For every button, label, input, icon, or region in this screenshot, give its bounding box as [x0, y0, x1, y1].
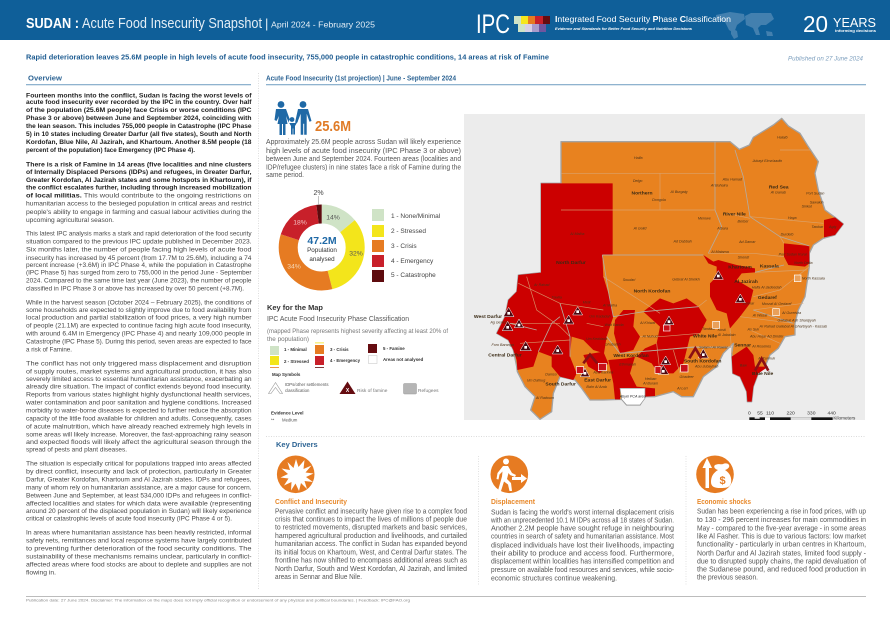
map labels: Salam / Ar Rawat — [699, 345, 728, 349]
map labels: Al Kurmuk — [757, 356, 775, 360]
refugee markers — [576, 275, 801, 373]
text block: overview paragraph 1: of the population (25.6M people) face Crisis or worse conditions (IPC — [26, 107, 252, 114]
displacement text: economic structures continue weakening. — [491, 576, 617, 583]
conflict text: humanitarian access. The conflict in Sudan has expanded beyond — [275, 541, 467, 548]
text block: overview paragraph 6: affected localities and states for which data were available (representing — [26, 500, 252, 507]
text block: overview paragraph 3: This latest IPC analysis marks a stark and rapid deterioration of the food security — [26, 231, 252, 238]
map labels: Um Keddada — [586, 337, 607, 341]
20 years logo — [803, 11, 876, 37]
map labels: Halaib — [777, 135, 788, 139]
map labels: Ag Geneina — [489, 320, 510, 324]
icon: displacement — [490, 456, 528, 493]
text block: overview paragraph 4: Catastrophe (IPC Phase 5). During this period, seven areas are expected to face — [26, 339, 252, 346]
20 years logo: 20 — [803, 11, 828, 37]
text block: projection summary: between June and September 2024. Fourteen areas (localities and — [266, 156, 461, 163]
scale bar: Kilometers — [833, 416, 856, 421]
text block: overview paragraph 1: acute food insecurity ever recorded by the IPC in the country. Over half — [26, 99, 252, 106]
text block: overview paragraph 2: Greater Kordofan, Al Jazirah states and some hotspots in Khartoum), if — [26, 177, 252, 184]
text block: overview paragraph 7: affected areas where food stocks are about to deplete and supplies are not — [26, 562, 252, 569]
map labels: Soudari — [623, 278, 635, 282]
map key: Key for the Map — [267, 303, 323, 312]
text block: overview paragraph 5: The conflict has not only triggered mass displacement and disruption — [26, 361, 252, 368]
text block: overview paragraph 3: 2024. Compared to the same time last year (June 2023), the number of people — [26, 277, 252, 284]
IPC logo: Evidence and Standards for Better Food Security and Nutrition Decisions — [555, 27, 692, 31]
text block: overview paragraph 5: morbidity to water-borne diseases is expected to further reduce the absorption — [26, 408, 252, 415]
map of Sudan: North Kordofan — [634, 289, 670, 295]
phase swatches — [270, 342, 424, 368]
map of Sudan — [464, 114, 865, 421]
map labels: Um Dafoug — [527, 378, 545, 382]
text block: overview paragraph 1 — [26, 93, 252, 154]
map labels: Heiban — [645, 377, 656, 381]
text block: overview paragraph 1: the lean season. This includes 755,000 people in Catastrophe (IPC Phase — [26, 123, 252, 130]
map labels: Shendi — [738, 255, 749, 259]
phase swatches: 1 - Minimal — [284, 347, 307, 352]
economic shocks heading: Economic shocks — [697, 497, 751, 506]
donut chart: 2% — [313, 190, 324, 197]
text block: overview paragraph 3: Six months later, the number of people facing high levels of acute food — [26, 247, 252, 254]
map labels: Dongola — [652, 198, 666, 202]
text block: overview paragraph 7 — [26, 530, 252, 577]
text block: overview paragraph 7: In areas where humanitarian assistance has been heavily restricted, informal — [26, 530, 252, 537]
displacement text: with an unprecedented 10.1 M IDPs across all 18 states of Sudan. — [490, 518, 674, 525]
phase 4 red areas — [497, 183, 843, 402]
text block: overview paragraph 6: The situation is especially critical for populations trapped into areas affected — [26, 461, 252, 468]
map labels: Abyei PCA area — [619, 394, 646, 398]
text block: overview paragraph 6: Darfur, Greater Kordofan, Khartoum and Al Jazirah states. IDPs and refugees, — [26, 477, 252, 484]
map labels: Port Sudan — [806, 192, 824, 196]
map labels: Sennar — [742, 301, 755, 305]
displacement text: displaced individuals have lost their livelihoods, impacting — [491, 542, 674, 549]
economic shocks text: functionality - particularly in urban centres in Khartoum, — [697, 542, 866, 549]
text block: overview paragraph 2: upcoming agricultural season. — [26, 217, 114, 224]
map labels: Delgo — [633, 179, 642, 183]
text block: overview paragraph 5: some areas will likely increase. Moreover, the fast-approaching rainy season — [26, 432, 252, 439]
conflict text: its initial focus on Khartoum, West, and Central Darfur states. The — [275, 549, 467, 556]
map labels: Agig — [828, 225, 836, 229]
map labels: Tawila — [552, 295, 562, 299]
text block: overview paragraph 5: of acute malnutrition, which have already reached extremely high levels in — [26, 424, 252, 431]
text block: overview paragraph 2: There is a risk of Famine in 14 areas (five localities and nine clusters — [26, 161, 252, 168]
text block: overview paragraph 4 — [25, 300, 252, 354]
text block: projection summary — [266, 139, 461, 179]
text block: projection summary: same period. — [266, 172, 304, 179]
text block: overview paragraph 2: the conflict escalates further, including through increased mobilization — [26, 185, 252, 192]
IPC logo — [476, 9, 731, 39]
text block: projection summary: IDP/refugee clusters) in nine states face a risk of Famine during the — [266, 164, 461, 171]
title — [26, 15, 375, 32]
displacement text: their ability to produce and access food. Furthermore, — [491, 550, 674, 557]
map of Sudan: North Darfur — [556, 260, 586, 266]
donut chart: 18% — [293, 220, 307, 226]
text block: overview paragraph 5: capacity of the little food available for children and adults. Consequently, cases — [26, 416, 252, 423]
map of Sudan: Gedaref — [758, 295, 777, 301]
displacement text: displacement within localities has intensified competition and — [491, 558, 674, 565]
conflict text: crisis that continues to impact the lives of millions of people due — [275, 517, 467, 524]
text block: overview paragraph 5: Reports from various states highlight highly dysfunctional health services, — [26, 392, 252, 399]
conflict text: frontline has now shifted to encompass additional areas such as — [275, 557, 467, 564]
map key: the population) — [267, 336, 309, 343]
displacement text — [490, 510, 675, 583]
economic shocks text — [697, 509, 867, 581]
abyei area not analysed — [620, 388, 645, 405]
icon: family — [274, 101, 312, 135]
text block: overview paragraph 7: to preventing further deterioration of the food security conditions. The — [26, 546, 252, 553]
economic shocks text: May - compared to the five-year average - in some areas — [697, 526, 866, 533]
key number: 25.6M — [315, 118, 351, 135]
map labels: Al Golid — [633, 226, 647, 230]
map labels: Ad Dabbah — [673, 239, 692, 243]
map labels: Halfa — [634, 156, 643, 160]
conflict text: to restricted movements, disrupted markets and basic services, — [275, 525, 467, 532]
world map watermark — [716, 12, 774, 39]
conflict text: areas in Sennar and Blue Nile. — [275, 574, 362, 581]
text block: overview paragraph 3 — [26, 231, 252, 292]
text block: overview paragraph 5: and expected floods will likely affect the agricultural season through the — [26, 439, 252, 446]
map of Sudan: South Kordofan — [684, 359, 721, 365]
text block: overview paragraph 2: of Internally Displaced Persons (IDPs) and refugees, in Greater Darfur, — [26, 169, 252, 176]
text block: overview paragraph 1: percent of the population) face Emergency (IPC Phase 4). — [26, 147, 195, 154]
icon: economic shocks — [696, 456, 734, 493]
projection heading: Acute Food Insecurity (1st projection) | June - September 2024 — [266, 76, 456, 82]
donut legend: 3 - Crisis — [391, 243, 417, 250]
map labels: Ghubaish — [605, 342, 620, 346]
displacement text: pressure on available food resources and services, while socio- — [491, 567, 675, 574]
map of Sudan: Kassala — [760, 263, 779, 269]
map labels: Durdeib — [781, 233, 793, 237]
headline: Rapid deterioration leaves 25.6M people in high levels of acute food insecurity, 755,000 people in catastrophic conditions, 14 areas at risk of Famine — [26, 52, 549, 62]
map labels: Al Roseires — [751, 344, 771, 348]
map of Sudan: Blue Nile — [752, 371, 774, 377]
map labels: Al Radoum — [535, 396, 554, 400]
map labels: North Kassala — [802, 276, 825, 280]
map labels: Tandalti — [702, 327, 715, 331]
icon: economic shocks: $ — [719, 475, 726, 487]
header banner — [0, 0, 890, 40]
publication date: Published on 27 June 2024 — [788, 56, 864, 62]
text block: overview paragraph 2: of local militias. This would contribute to the ongoing restrictions on — [26, 193, 252, 200]
text block: overview paragraph 4: a risk of Famine. — [26, 347, 72, 354]
map of Sudan: West Darfur — [474, 314, 502, 320]
displacement heading: Displacement — [491, 497, 536, 506]
map labels: Jubayt Elma'aadin — [751, 159, 782, 163]
text block: overview paragraph 4: While in the harvest season (October 2024 – February 2025), the conditions of — [26, 300, 252, 307]
economic shocks text: to 130 - 296 percent increases for main commodities in — [697, 517, 866, 524]
scale bar: 440 — [827, 410, 836, 416]
map labels: Tawkar — [812, 225, 824, 229]
text block: overview paragraph 4: with around 6.4M in Emergency (IPC Phase 4) and nearly 109,000 people in — [25, 331, 252, 338]
map of Sudan: Central Darfur — [488, 353, 522, 359]
text block: overview paragraph 5: of supply routes, market systems and agricultural production, it has also — [26, 369, 252, 376]
map labels: Bahr Al Arab — [586, 385, 607, 389]
map labels: Melit — [583, 300, 592, 304]
map labels: Port Sudan Rural — [779, 253, 807, 257]
map of Sudan: Khartoum — [728, 264, 752, 270]
map labels: Kosti — [718, 328, 726, 332]
state and locality boundaries — [510, 150, 823, 373]
map labels: Ad Damar — [738, 240, 756, 244]
map symbols — [268, 372, 439, 394]
map of Sudan: Sennar — [734, 343, 751, 349]
map labels: Al Leri — [676, 387, 688, 391]
text block: overview paragraph 4: some households are expected to slightly improve due to food availability from — [26, 307, 252, 314]
title: April 2024 - February 2025 — [271, 20, 375, 30]
map labels: Halfa Al Jadeedah — [752, 285, 782, 289]
text block: overview paragraph 4: of people (21.1M) are expected to continue facing high acute food insecurity, — [26, 323, 252, 330]
text block: overview paragraph 5: already dire situation. The impact of conflict extends beyond food insecurity. — [26, 384, 252, 391]
map labels: Al Jabalain — [717, 333, 736, 337]
donut legend: 2 - Stressed — [391, 228, 426, 235]
map labels: Gebrat Al Sheikh — [672, 277, 700, 281]
donut legend: 1 - None/Minimal — [391, 213, 441, 220]
map labels: Al Buram — [642, 382, 658, 386]
panel: key drivers — [266, 436, 867, 585]
map labels: Haya — [788, 216, 797, 220]
icon: conflict burst — [277, 456, 315, 493]
IPC logo: IPC — [476, 9, 510, 39]
economic shocks text: like Al Fasher. This is due to various factors: low market — [697, 534, 866, 541]
text block: overview paragraph 2 — [26, 161, 252, 224]
text block: projection summary: high levels of acute food insecurity (IPC Phase 3 or above) — [266, 148, 461, 155]
donut chart: 14% — [326, 214, 340, 222]
text block: overview paragraph 6: many of whom rely on humanitarian assistance, are a major cause for concern. — [26, 485, 252, 492]
map labels: Abu Karinka — [592, 370, 613, 374]
text block: overview paragraph 5: water contamination and poor sanitation and hygiene conditions. Increased — [25, 400, 252, 407]
20 years logo: informing decisions — [835, 29, 876, 33]
IPC logo: Integrated Food Security Phase Classification — [555, 14, 731, 24]
map of Sudan: Al Jazirah — [734, 279, 758, 285]
phase swatches: Areas not analysed — [383, 357, 424, 362]
text block: overview paragraph 3: classified in IPC Phase 3 or above has increased by over 50 percent (+8.7M). — [26, 285, 244, 292]
map key — [267, 303, 448, 422]
risk of famine triangles — [502, 271, 745, 377]
map labels: North Delta — [794, 261, 813, 265]
map labels: Al Nuhud — [641, 334, 658, 338]
text block: overview paragraph 6: by direct conflict, insecurity and lack of protection, particularly in Greater — [26, 469, 252, 476]
map labels: Atbara — [716, 226, 728, 230]
scale bar: 55 — [757, 410, 763, 416]
donut chart: Population — [307, 247, 337, 254]
donut legend: 4 - Emergency — [391, 258, 434, 265]
map labels: Al Ganab — [770, 191, 786, 195]
map labels: Merowe — [698, 216, 711, 220]
map labels: Ar Rahad — [533, 283, 550, 287]
donut chart: analysed — [309, 256, 335, 263]
donut chart — [287, 190, 363, 281]
phase swatches: 5 - Famine — [383, 346, 405, 351]
text block: overview paragraph 6 — [26, 461, 252, 523]
displacement text: countries in search of safety and humanitarian assistance. Most — [491, 534, 674, 541]
map labels: Al Khiwai — [639, 321, 655, 325]
map labels: Al Matama — [710, 250, 729, 254]
economic shocks text: the Sudanese pound, and reduced food production in — [697, 566, 866, 573]
map labels: Al Gureisha — [781, 311, 801, 315]
economic shocks text: the previous season. — [697, 574, 758, 581]
scale bar: 110 — [766, 410, 774, 416]
text block: overview paragraph 1: Fourteen months into the conflict, Sudan is facing the worst levels of — [26, 93, 252, 100]
map labels: Um Kadadah — [589, 315, 611, 319]
map symbols: IDPs/other settlements — [285, 382, 328, 387]
conflict text: hampered agricultural production and livelihoods, and curtailed — [275, 533, 467, 540]
donut chart: 34% — [287, 264, 301, 270]
map labels: Al Malha — [602, 304, 617, 308]
phase swatches: 4 - Emergency — [330, 358, 361, 363]
map labels: Gallabat Ash Sharqiyah — [778, 319, 816, 323]
map labels: Al Wasat — [752, 314, 768, 318]
footer: Publication date: 27 June 2024. Disclaimer: The information on the maps does not imply official recognition or endorsement of any physical and political boundaries. | Feedback: IPC@FAO.org — [26, 598, 410, 602]
text block: overview paragraph 6: around 20 percent of the displaced population in Sudan) will likely experience — [26, 508, 252, 515]
map labels: Wad Banda — [604, 323, 624, 327]
map labels: Al Burgaig — [670, 190, 687, 194]
displacement text: Sudan is facing the world's worst internal displacement crisis — [491, 510, 674, 517]
evidence level — [271, 410, 304, 422]
map labels: Damso — [545, 373, 557, 377]
text block: overview paragraph 5: severely limited access to essential humanitarian assistance, exacerbating an — [26, 376, 252, 383]
phase swatches: 2 - Stressed — [284, 359, 309, 364]
conflict text: Pervasive conflict and insecurity have given rise to a complex food — [275, 509, 467, 516]
map labels: Ethmanah — [619, 363, 636, 367]
phase swatches: 3 - Crisis — [330, 347, 349, 352]
evidence level: Medium — [282, 418, 298, 422]
map symbols: X — [346, 388, 350, 394]
20 years logo: YEARS — [833, 15, 876, 30]
text block: overview paragraph 3: situation compared to the previous IPC update published in December 2023. — [26, 239, 252, 246]
donut legend — [372, 209, 441, 282]
title: Acute Food Insecurity Snapshot — [82, 15, 263, 32]
text block: overview paragraph 5 — [25, 361, 252, 454]
text block: overview paragraph 3: percent increase (+3.6M) in IPC Phase 4, while the population in Catastrophe — [26, 262, 252, 269]
map symbols: Refugees — [418, 388, 439, 394]
map of Sudan: West Kordofan — [613, 353, 649, 359]
text block: overview paragraph 7: flowing in. — [26, 570, 56, 577]
text block: overview paragraph 2: humanitarian access to the besieged population in critical areas and restrict — [26, 201, 252, 208]
map labels: Ar Rahad Gallabat Al Gharbiyah - Kassab — [759, 324, 827, 328]
scale bar — [748, 410, 856, 421]
map labels: Baw — [740, 364, 747, 368]
map symbols: classification — [285, 388, 310, 393]
text block: overview paragraph 1: Kordofan, Blue Nile, Al Jazirah, and Khartoum. Another 8.5M people (18 — [26, 139, 252, 146]
text block: overview paragraph 5: spread of pests and plant diseases. — [26, 447, 127, 454]
evidence level: Evidence Level — [271, 410, 304, 416]
text block: overview paragraph 1: Phase 3 or above) between June and September 2024, coinciding with — [26, 115, 252, 122]
economic shocks text: due to disrupted supply chains, the rapid devaluation of — [697, 558, 866, 565]
scale bar: 220 — [786, 410, 795, 416]
evidence level: ** — [271, 418, 275, 422]
scale bar: 0 — [748, 410, 751, 416]
map key: IPC Acute Food Insecurity Phase Classification — [267, 316, 409, 323]
text block: overview paragraph 7: safety nets, remittances and local response systems have largely contributed — [26, 538, 252, 545]
overview heading: Overview — [28, 76, 63, 82]
map labels: Foro Baranga — [491, 343, 514, 347]
text block: overview paragraph 6: critical or catastrophic levels of acute food insecurity (IPC Phase 4 or 5). — [26, 516, 232, 523]
IDP chevrons — [583, 348, 768, 371]
map labels: Abu Hujar Ad Dinder — [749, 335, 784, 339]
conflict text: North Darfur, South and West Kordofan, Al Jazirah, and limited — [275, 566, 467, 573]
donut chart: 47.2M — [307, 235, 337, 247]
map labels: Mosraf Al Gedaref — [762, 302, 792, 306]
map labels: Ghadeer — [680, 375, 695, 379]
displacement text: Another 2.2M people have sought refuge in neighbouring — [491, 526, 674, 533]
conflict heading: Conflict and Insecurity — [275, 497, 347, 506]
key drivers heading: Key Drivers — [276, 440, 318, 449]
country base: phase 3 orange — [497, 118, 843, 419]
donut chart: 32% — [349, 250, 363, 258]
economic shocks text: Sudan has been experiencing a rise in food prices, with up — [697, 509, 866, 516]
map labels: Sinkat — [802, 205, 813, 209]
map labels: Sawakin — [810, 201, 824, 205]
text block: overview paragraph 1: 5) in 10 states including Greater Darfur (all five states), South and North — [26, 131, 252, 138]
map labels: Abu Jubayhah — [694, 364, 718, 368]
text block: overview paragraph 3: insecurity has increased by 45 percent (from 17.7M to 25.6M), including a 74 — [26, 255, 252, 262]
economic shocks text: North Darfur and Al Jazirah states, limited food supply - — [697, 550, 867, 557]
text block: projection summary: Approximately 25.6M people across Sudan will likely experience — [266, 139, 461, 146]
scale bar: 330 — [807, 410, 816, 416]
text block: overview paragraph 7: sustainability of these mechanisms remains unclear, particularly in conflict- — [26, 554, 252, 561]
map labels — [489, 135, 836, 400]
map of Sudan: Red Sea — [769, 185, 789, 191]
map of Sudan: River Nile — [723, 211, 746, 217]
map symbols: Map Symbols — [272, 372, 301, 377]
title: SUDAN : — [26, 15, 79, 32]
text block: overview paragraph 2: people's ability to engage in farming and casual labour activities during the — [26, 209, 252, 216]
map labels: Al Malha — [569, 232, 584, 236]
map symbols: Risk of famine — [357, 388, 388, 394]
map of Sudan: East Darfur — [584, 378, 611, 384]
text block: overview paragraph 4: local production and partial stabilization of food prices, a very high number — [26, 315, 252, 322]
map of Sudan: White Nile — [693, 333, 717, 339]
text block: overview paragraph 3: (IPC Phase 5) has surged from zero to 755,000 in the period June - September — [26, 270, 252, 277]
conflict text — [275, 509, 467, 581]
donut legend: 5 - Catastrophe — [391, 272, 436, 279]
map labels: As Suk — [747, 328, 759, 332]
text block: overview paragraph 6: Between June and September, at least 534,000 IDPs and refugees in conflict- — [26, 493, 252, 500]
map of Sudan: South Darfur — [545, 381, 576, 387]
map key: (mapped Phase represents highest severity affecting at least 20% of — [267, 328, 448, 335]
map labels: Abu Hamad — [722, 178, 743, 182]
map labels: Berber — [738, 219, 749, 223]
map of Sudan: Northern — [631, 190, 653, 196]
map labels: Al Buhaira — [710, 184, 728, 188]
title: | — [265, 16, 268, 31]
